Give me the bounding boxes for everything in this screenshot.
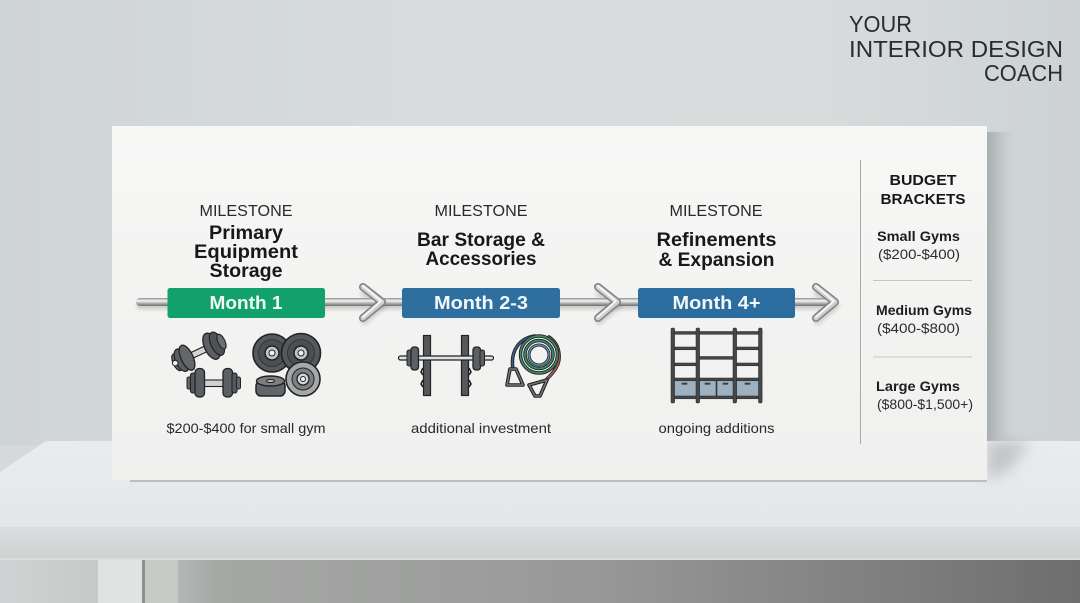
- small gyms bracket: [877, 228, 960, 262]
- milestone 2 caption: additional investment: [411, 420, 551, 436]
- arrowhead 1: [363, 286, 382, 318]
- table front edge: [0, 527, 1080, 560]
- budget heading: [880, 172, 966, 208]
- icon: barbell rack: [398, 336, 494, 396]
- large gyms bracket: ($800-$1,500+): [877, 396, 973, 412]
- small gyms bracket: ($200-$400): [878, 246, 960, 262]
- milestone 3 heading: & Expansion: [658, 250, 774, 271]
- milestone 3 heading: MILESTONE: [670, 203, 762, 220]
- milestone 3 heading: [656, 203, 776, 271]
- budget heading: BRACKETS: [880, 191, 966, 208]
- icon: weight plates: [253, 334, 320, 396]
- logo: [849, 11, 1063, 86]
- large gyms bracket: [876, 378, 973, 412]
- milestone 1 heading: Equipment: [194, 242, 299, 263]
- wall background: [0, 0, 1080, 445]
- arrowhead 3: [816, 286, 835, 318]
- milestone 2 pill: [402, 288, 560, 318]
- floor and table legs: [0, 558, 1080, 603]
- small gyms bracket: Small Gyms: [877, 228, 960, 244]
- icon: resistance bands: [507, 336, 559, 396]
- table top: [0, 441, 1080, 530]
- milestone 1 pill: Month 1: [210, 293, 282, 313]
- panel: budget brackets: [860, 160, 973, 444]
- milestone 1 heading: MILESTONE: [200, 203, 292, 220]
- milestone 3 caption: ongoing additions: [658, 420, 774, 436]
- milestone 3 heading: Refinements: [656, 230, 776, 251]
- medium gyms bracket: [876, 302, 972, 336]
- logo: COACH: [984, 60, 1063, 86]
- timeline arrow: [136, 286, 835, 323]
- medium gyms bracket: Medium Gyms: [876, 302, 972, 318]
- logo: INTERIOR DESIGN: [849, 36, 1063, 62]
- milestone 2 pill: Month 2-3: [434, 293, 528, 313]
- milestone 1 heading: [194, 203, 299, 282]
- milestone 1 heading: Storage: [210, 261, 282, 282]
- large gyms bracket: Large Gyms: [876, 378, 960, 394]
- milestone 2 heading: Accessories: [426, 249, 536, 270]
- icon: dumbbells: [167, 327, 240, 397]
- icon: shelving unit: [671, 328, 762, 403]
- arrowhead 2: [598, 286, 617, 318]
- milestone 1 heading: Primary: [209, 223, 283, 244]
- milestone 1 pill: [168, 288, 325, 318]
- wall shadow beside panel: [987, 132, 1030, 480]
- milestone 2 heading: Bar Storage &: [417, 230, 545, 251]
- panel: milestones board: [112, 126, 987, 482]
- milestone 2 heading: [417, 203, 545, 270]
- budget heading: BUDGET: [890, 172, 956, 189]
- milestone 1 caption: $200-$400 for small gym: [166, 420, 326, 436]
- milestone 3 pill: Month 4+: [672, 293, 760, 313]
- logo: YOUR: [849, 11, 912, 37]
- medium gyms bracket: ($400-$800): [877, 320, 960, 336]
- milestone 3 pill: [638, 288, 795, 318]
- milestone 2 heading: MILESTONE: [434, 203, 528, 220]
